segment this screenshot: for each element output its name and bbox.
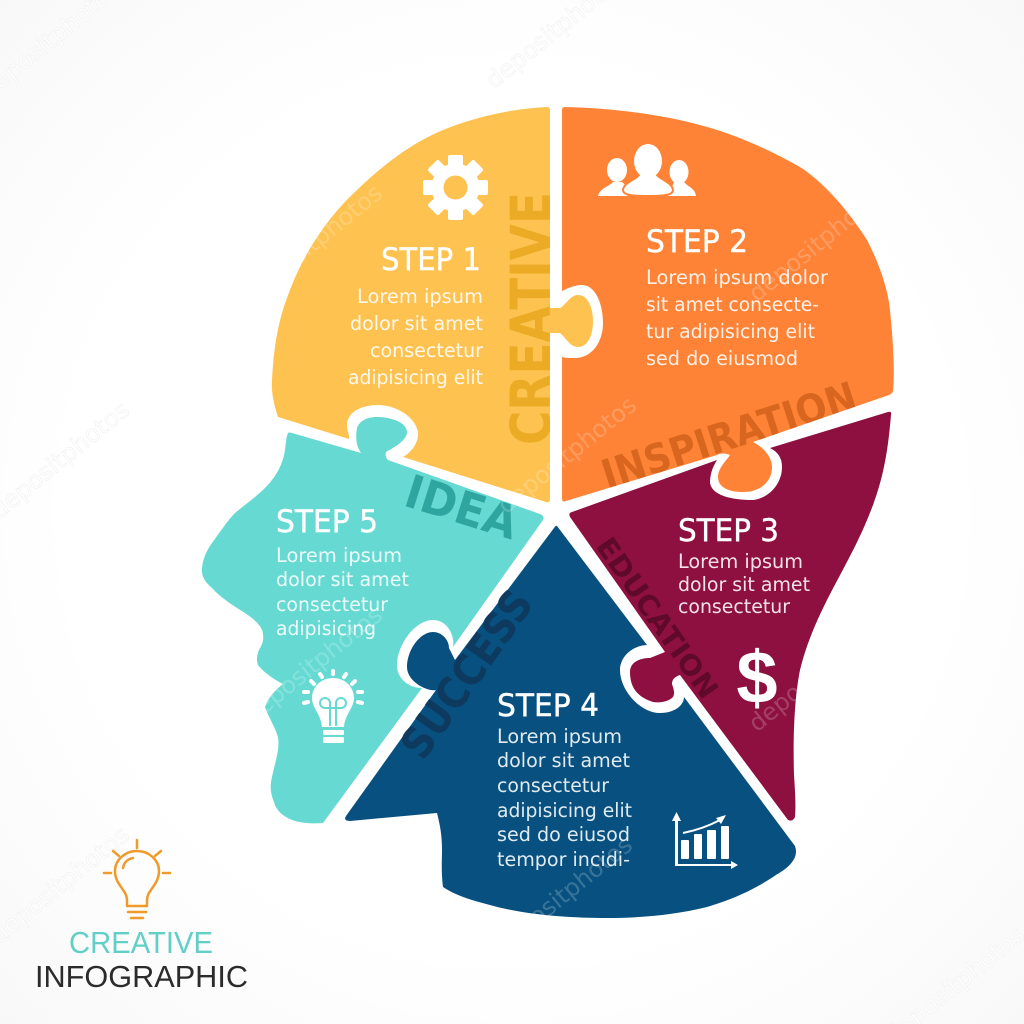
heading: step 1: STEP 1 (381, 242, 481, 278)
text: step 1 body: adipisicing elit (348, 366, 483, 389)
panel: step 2 orange puzzle piece (562, 107, 894, 502)
text: step 1 body (348, 285, 484, 389)
logo: creative infographic (35, 840, 248, 994)
text: step 2 body (646, 266, 829, 370)
panel: step 3 maroon puzzle piece (569, 412, 891, 821)
text: step 3 body: consectetur (678, 595, 791, 618)
text: step 3 body: Lorem ipsum (678, 550, 803, 573)
text: step 1 body: consectetur (370, 339, 484, 362)
text: step 2 body: tur adipisicing elit (646, 320, 815, 343)
icon: bar chart (672, 812, 738, 869)
word: INSPIRATION: INSPIRATION (596, 374, 862, 499)
text: step 2 body: sit amet consecte- (646, 293, 819, 316)
text: step 5 body: dolor sit amet (276, 568, 409, 591)
word: EDUCATION: EDUCATION (589, 531, 725, 705)
text: INFOGRAPHIC: INFOGRAPHIC (35, 959, 248, 994)
text: step 5 body: consectetur (276, 593, 389, 616)
word: CREATIVE: CREATIVE (499, 192, 563, 445)
head puzzle diagram (202, 107, 894, 918)
panel: step 5 teal puzzle piece (202, 417, 544, 823)
panel: step 4 navy puzzle piece (345, 526, 796, 918)
text: CREATIVE: CREATIVE (69, 925, 213, 960)
text: step 2 body: sed do eiusmod (646, 347, 798, 370)
text: step 1 body: dolor sit amet (350, 312, 483, 335)
text: step 4 body: dolor sit amet (497, 749, 630, 772)
text: step 1 body: Lorem ipsum (357, 285, 483, 308)
icon: light bulb (304, 671, 362, 743)
panel: step 1 yellow puzzle piece (272, 107, 593, 502)
text: step 4 body: consectetur (497, 774, 610, 797)
text: step 4 body: adipisicing elit (497, 799, 632, 822)
text: step 5 body (276, 544, 409, 640)
icon: orange outline light bulb (104, 840, 170, 918)
text: step 4 body: Lorem ipsum (497, 725, 622, 748)
text: step 2 body: Lorem ipsum dolor (646, 266, 829, 289)
text: step 5 body: adipisicing (276, 617, 376, 640)
text: step 3 body (678, 550, 810, 618)
text: step 5 body: Lorem ipsum (276, 544, 402, 567)
text: depositphotos (492, 391, 642, 519)
word: SUCCESS: SUCCESS (391, 581, 544, 768)
heading: step 3: STEP 3 (678, 513, 779, 549)
icon: people (598, 144, 696, 196)
word: IDEA: IDEA (399, 464, 525, 550)
text: step 3 body: dolor sit amet (678, 573, 810, 596)
heading: step 2: STEP 2 (646, 224, 748, 260)
text: depositphotos (488, 831, 638, 959)
text: step 4 body: tempor incidi- (497, 848, 630, 871)
text: depositphotos (238, 179, 388, 307)
icon: dollar sign: $ (736, 636, 778, 719)
text: step 4 body (497, 725, 632, 871)
text: depositphotos (238, 601, 388, 729)
heading: step 5: STEP 5 (276, 504, 378, 540)
text: step 4 body: sed do eiusod (497, 823, 630, 846)
text: depositphotos (743, 179, 893, 307)
icon: gear (423, 155, 488, 220)
text: depositphotos (743, 609, 893, 737)
heading: step 4: STEP 4 (497, 688, 599, 724)
